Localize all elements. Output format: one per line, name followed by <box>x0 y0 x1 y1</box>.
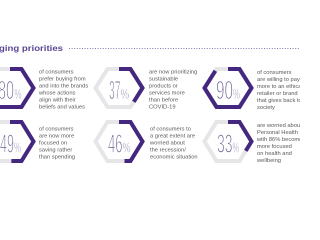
stat: 90 percent: % <box>233 86 240 103</box>
stat: 80 percent: of consumers <box>39 70 74 76</box>
stat: 49 percent: saving rather <box>39 148 72 154</box>
stat: 46 percent: worried about <box>149 140 185 146</box>
stat: 49 percent: 49 <box>0 128 14 158</box>
stat: 46 percent: % <box>122 140 130 156</box>
stat: 37 percent: services more <box>149 90 185 96</box>
stat: 49 percent: focused on <box>39 140 67 146</box>
stat: 49 percent: are now more <box>39 134 74 140</box>
stat: 33 percent: Personal Health <box>257 130 298 136</box>
stat: 49 percent: than spending <box>39 154 75 160</box>
stat: 80 percent: and into the brands <box>39 84 88 90</box>
stat: 80 percent <box>0 69 88 110</box>
stat: 46 percent: a great extent are <box>150 134 195 140</box>
stat: 37 percent <box>96 69 197 110</box>
stat: 90 percent: retailer or brand <box>257 91 298 97</box>
stat: 37 percent: % <box>120 86 129 103</box>
stat: 49 percent: % <box>14 140 21 156</box>
stat: 46 percent: of consumers to <box>150 126 191 132</box>
stat: 90 percent: are willing to pay <box>257 77 300 83</box>
stat: 49 percent: of consumers <box>39 126 74 132</box>
stat: 90 percent: society <box>257 105 275 111</box>
stat: 37 percent: sustainable <box>149 76 178 82</box>
stat: 33 percent <box>204 122 302 164</box>
stat: 37 percent: are now prioritizing <box>149 70 197 76</box>
stat: 80 percent: whose actions <box>38 90 76 96</box>
stat: 46 percent: the recession/ <box>150 148 186 154</box>
stat: 49 percent <box>0 122 75 161</box>
stat: 33 percent: % <box>232 140 239 156</box>
stat: 33 percent: on health and <box>257 151 292 157</box>
stat: 37 percent: products or <box>149 84 178 90</box>
stat: 33 percent: wellbeing <box>256 158 281 164</box>
stat: 90 percent <box>204 69 303 111</box>
stat: 46 percent: economic situation <box>150 154 198 160</box>
stat: 46 percent <box>96 122 198 161</box>
stat: 33 percent: more focused <box>257 144 292 150</box>
stat: 90 percent: 90 <box>216 75 233 105</box>
stat: 37 percent: COVID-19 <box>149 104 176 110</box>
stat: 33 percent: 33 <box>217 128 232 158</box>
stat: 80 percent: % <box>14 86 22 103</box>
stat: 37 percent: than before <box>149 98 178 104</box>
stat: 80 percent: prefer buying from <box>39 76 86 82</box>
stat: 80 percent: beliefs and values <box>39 104 85 110</box>
stat: 46 percent: 46 <box>108 128 122 158</box>
stat: 90 percent: of consumers <box>257 70 292 76</box>
stat: 37 percent: 37 <box>109 75 120 105</box>
stat: 80 percent: align with their <box>39 98 76 104</box>
